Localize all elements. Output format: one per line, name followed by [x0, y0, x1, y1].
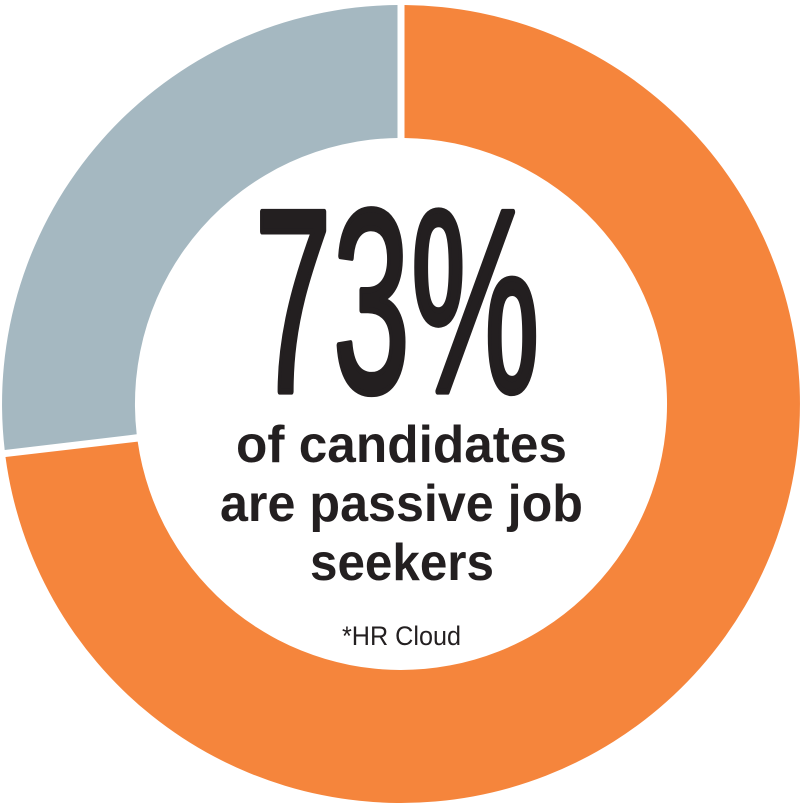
statement text [220, 416, 583, 592]
line 1: of candidates [236, 416, 567, 474]
line 2: are passive job [220, 475, 583, 533]
digit 7: 7 [255, 157, 332, 448]
big percentage [255, 155, 540, 448]
source note: *HR Cloud [342, 621, 461, 651]
line 3: seekers [310, 534, 494, 592]
digit 3: 3 [333, 157, 410, 448]
segment: gray 27% [2, 5, 398, 450]
percent sign: % [411, 155, 540, 447]
